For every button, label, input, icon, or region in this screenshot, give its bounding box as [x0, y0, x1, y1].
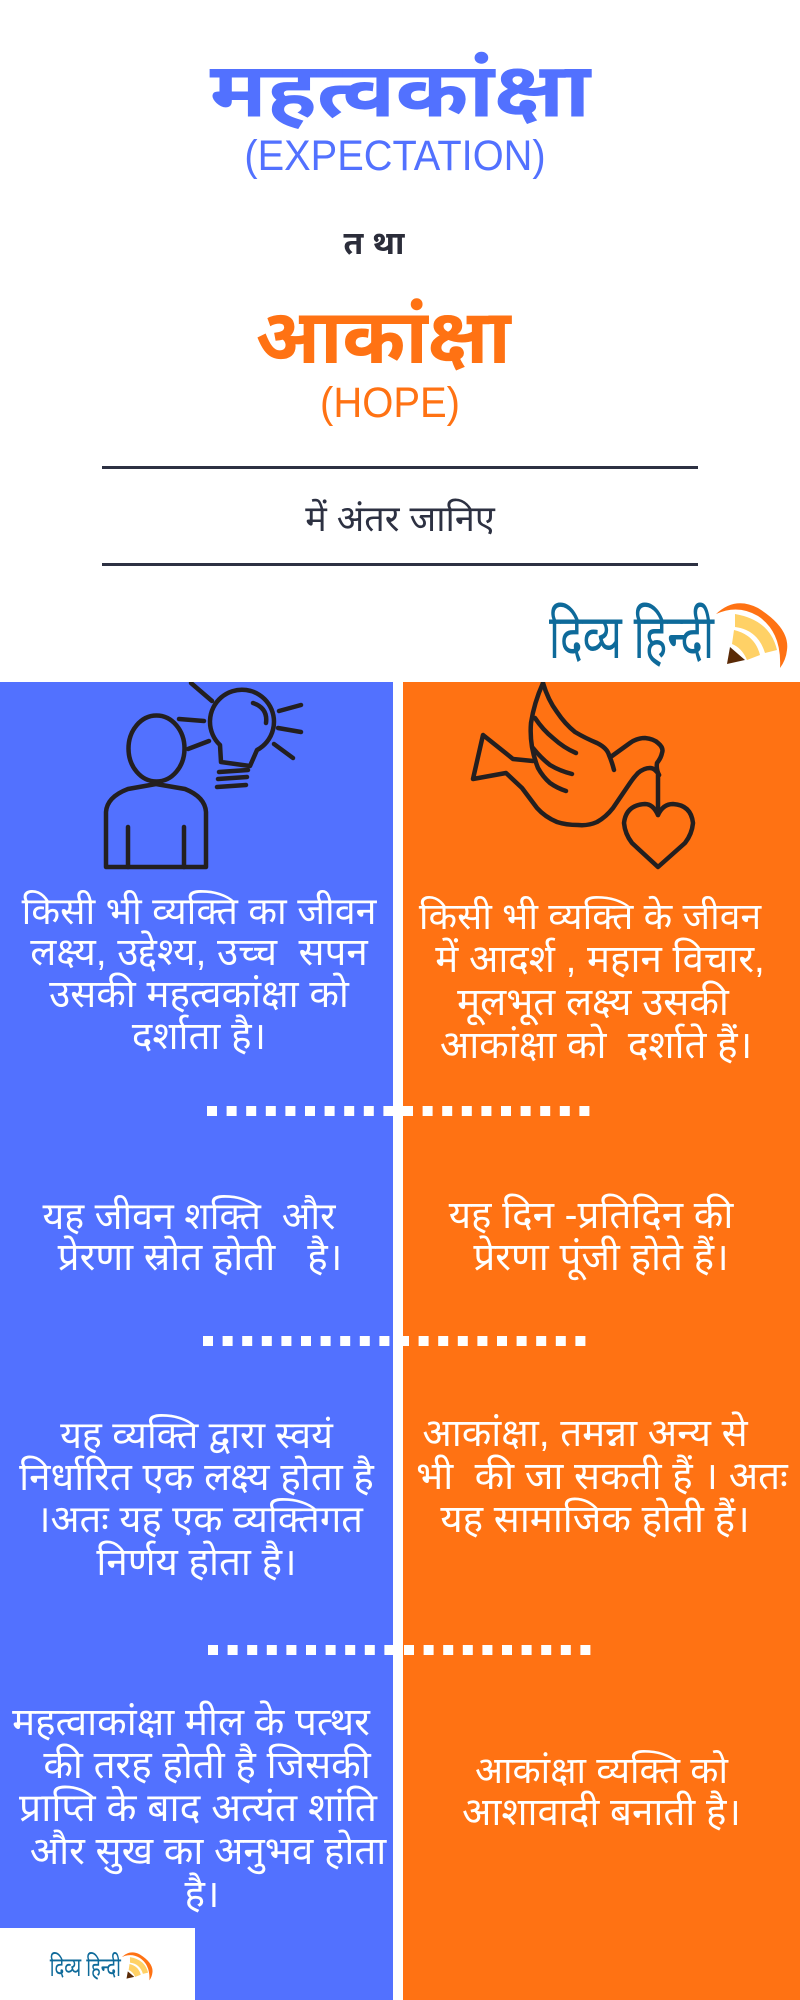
icon: dove carrying heart [470, 682, 696, 870]
text: hope point 3 [416, 1411, 788, 1540]
text: hope point 1: आकांक्षा को दर्शाते हैं। [440, 1024, 752, 1066]
title: आकांक्षा: आकांक्षा [255, 295, 511, 380]
text: hope point 4: आशावादी बनाती है। [462, 1791, 741, 1834]
text: expectation point 3: निर्धारित एक लक्ष्य होता है [19, 1456, 374, 1498]
text: hope point 1: किसी भी व्यक्ति के जीवन [419, 894, 761, 936]
logo: top right: दिव्य हिन्दी [549, 602, 715, 672]
text: expectation point 4: और सुख का अनुभव होता [30, 1830, 386, 1872]
text: hope point 3: आकांक्षा, तमन्ना अन्य से [422, 1412, 748, 1454]
text: expectation point 1: दर्शाता है। [132, 1015, 266, 1058]
subtitle: expectation: (EXPECTATION) [244, 132, 546, 180]
text: expectation point 1: किसी भी व्यक्ति का जीवन [22, 890, 376, 932]
text: expectation point 1: लक्ष्य, उद्देश्य, उच्च सपन [30, 931, 368, 974]
text: expectation point 3: यह व्यक्ति द्वारा स्वयं [60, 1414, 333, 1456]
text: expectation point 1: उसकी महत्वकांक्षा को [49, 973, 349, 1016]
text: hope point 2 [448, 1194, 734, 1280]
text: expectation point 1 [22, 890, 377, 1058]
text: hope point 3: भी की जा सकती हैं । अतः [416, 1454, 788, 1498]
text: expectation point 4: प्राप्ति के बाद अत्यंत शांति [19, 1786, 377, 1830]
title: महत्वकांक्षा: महत्वकांक्षा [210, 48, 590, 133]
panel: expectation (blue) [0, 682, 393, 2000]
text: expectation point 3: ।अतः यह एक व्यक्तिगत [36, 1499, 363, 1541]
subtitle: hope: (HOPE) [320, 379, 460, 427]
text: hope point 2: प्रेरणा पूंजी होते हैं। [473, 1236, 729, 1279]
text: expectation point 4: महत्वाकांक्षा मील के पत्थर [12, 1700, 370, 1744]
text: expectation point 3 [19, 1414, 374, 1584]
text: hope point 4 [462, 1750, 741, 1834]
text: hope point 1: में आदर्श , महान विचार, [435, 938, 765, 980]
subheading: में अंतर जानिए [305, 498, 495, 539]
text: expectation point 3: निर्णय होता है। [96, 1540, 297, 1584]
logo: bottom left badge [0, 1928, 195, 2000]
text: expectation point 4: की तरह होती है जिसकी [43, 1744, 371, 1786]
text: expectation point 2 [42, 1195, 342, 1279]
text: hope point 4: आकांक्षा व्यक्ति को [475, 1750, 728, 1791]
text: hope point 1 [418, 894, 765, 1066]
panel: hope (orange) [403, 682, 800, 2000]
text: expectation point 2: प्रेरणा स्रोत होती है। [58, 1236, 342, 1279]
text: expectation point 4: है। [184, 1872, 220, 1916]
logo: bottom left badge: दिव्य हिन्दी [50, 1952, 122, 1982]
text: expectation point 4 [12, 1700, 387, 1916]
text: hope point 1: मूलभूत लक्ष्य उसकी [457, 980, 729, 1024]
icon: person with light bulb [104, 682, 304, 870]
text: hope point 3: यह सामाजिक होती हैं। [440, 1498, 750, 1540]
connector word: त था [344, 225, 404, 261]
text: expectation point 2: यह जीवन शक्ति और [43, 1195, 335, 1237]
text: hope point 2: यह दिन -प्रतिदिन की [449, 1194, 733, 1237]
